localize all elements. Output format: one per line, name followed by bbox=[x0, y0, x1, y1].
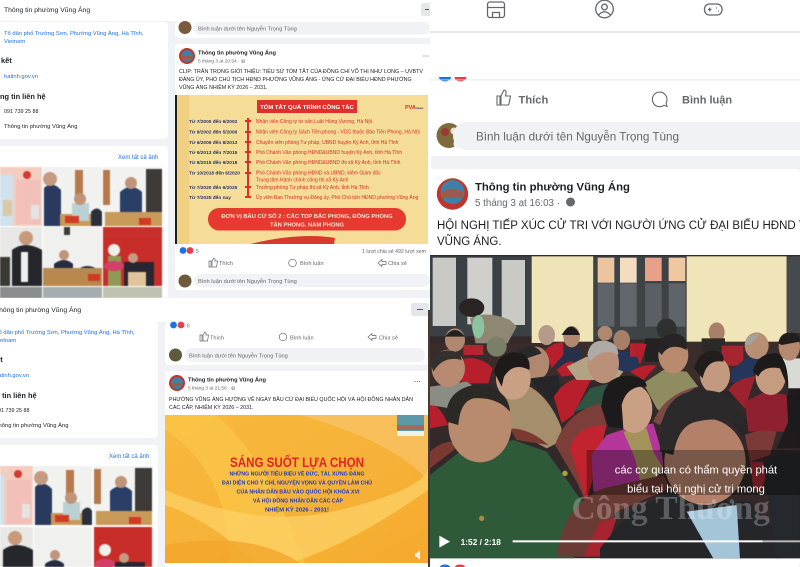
timeline dates: Từ 9/2002 đến 5/2006 bbox=[189, 128, 238, 136]
address: Vietnam bbox=[4, 39, 25, 45]
icon: groups bbox=[596, 0, 613, 18]
woman beige jacket bbox=[494, 352, 562, 448]
timeline dates: Từ 9/2013 đến 7/2015 bbox=[189, 149, 238, 156]
avatar bbox=[178, 21, 192, 34]
timeline dates: Từ 6/2006 đến 8/2013 bbox=[189, 139, 238, 146]
timeline dates bbox=[189, 118, 240, 201]
action buttons: Bình luận bbox=[290, 336, 314, 342]
comment input: Bình luận dưới tên Nguyễn Trọng Tùng bbox=[476, 130, 679, 144]
panel: reaction and comment row of second post bbox=[165, 322, 431, 365]
panel: photos lower left bbox=[0, 445, 158, 567]
reactions bbox=[439, 77, 466, 82]
woman dark hair bbox=[694, 351, 753, 437]
caption background bbox=[587, 450, 800, 495]
banner headline: SÁNG SUỐT LỰA CHỌN bbox=[230, 453, 364, 470]
phone: 091 739 25 88 bbox=[4, 109, 38, 115]
timeline positions bbox=[256, 119, 420, 201]
heading: links: kết bbox=[1, 56, 12, 65]
panel: page info upper left bbox=[0, 0, 430, 139]
video: election banner bbox=[165, 415, 428, 563]
panel: comment box top post: Bình luận dưới tên Nguyễn Trọng Tùng bbox=[198, 26, 297, 32]
electoral unit pill bbox=[208, 208, 406, 230]
action buttons: Chia sẻ bbox=[379, 336, 398, 342]
action buttons: Thích bbox=[210, 336, 224, 342]
header bar divider upper bbox=[175, 0, 431, 21]
icon: globe bbox=[566, 198, 575, 206]
comment input bbox=[453, 122, 800, 150]
post avatar bbox=[169, 375, 185, 391]
infographic: work history bbox=[175, 95, 428, 244]
timeline positions: Phó Chánh Văn phòng HĐND&UBND huyện Kỳ Anh, tỉnh Hà Tĩnh bbox=[256, 149, 402, 156]
timeline positions: Phó Chánh Văn phòng HĐND&UBND thị xã Kỳ Anh, tỉnh Hà Tĩnh bbox=[256, 159, 401, 166]
timeline positions: Trưởng phòng Tư pháp thị xã Kỳ Anh, tỉnh Hà Tĩnh bbox=[256, 184, 369, 191]
timeline dates: Từ 8/2015 đến 9/2018 bbox=[189, 159, 238, 166]
panel: right top navigation bbox=[430, 0, 800, 33]
dark person edge bbox=[777, 388, 800, 448]
reactions: 5 bbox=[196, 249, 199, 255]
label: like: Thích bbox=[518, 94, 548, 106]
chair right red bbox=[728, 377, 755, 408]
post date: 5 tháng 3 at 16:03 · bbox=[475, 198, 560, 209]
reactions bbox=[170, 322, 190, 330]
icon: marketplace bbox=[487, 2, 505, 18]
header bar upper: Thông tin phường Vũng Áng bbox=[4, 5, 90, 14]
reactions: 6 bbox=[187, 324, 190, 330]
commenter row: Bình luận dưới tên Nguyễn Trọng Tùng bbox=[198, 278, 297, 285]
banner title bbox=[257, 100, 357, 113]
front centre man bbox=[600, 390, 780, 558]
panel: right reaction and comment row bbox=[430, 33, 800, 156]
front centre chair bbox=[557, 475, 670, 557]
timeline bbox=[245, 118, 251, 198]
front left man bbox=[430, 385, 583, 558]
icon: comment bbox=[652, 92, 667, 107]
video: voters meeting: biểu tại hội nghị cử tri mong bbox=[627, 483, 765, 495]
post author: Thông tin phường Vũng Áng bbox=[198, 50, 276, 56]
panel: page info lower left bbox=[0, 298, 430, 438]
timeline positions: Phó Chánh Văn phòng HĐND và UBND, kiêm Giám đốc bbox=[256, 170, 381, 176]
post options: ··· bbox=[423, 54, 429, 60]
heading: contact: ng tin liên hệ bbox=[0, 92, 46, 101]
post stats: 1 lượt chia sẻ 492 lượt xem bbox=[362, 249, 426, 255]
timeline positions: Chuyên viên phòng Tư pháp, UBND huyện Kỳ Anh, tỉnh Hà Tĩnh bbox=[256, 139, 399, 146]
action buttons: Thích bbox=[219, 261, 233, 267]
electoral unit pill: TÂN PHONG, NAM PHONG bbox=[270, 222, 345, 228]
commenter avatar bbox=[436, 123, 462, 148]
man right white shirt bbox=[778, 333, 800, 388]
watermark: Công Thương bbox=[572, 490, 770, 527]
post author: Thông tin phường Vũng Áng bbox=[188, 376, 266, 384]
reactions bbox=[180, 247, 199, 255]
banner title: TÓM TẮT QUÁ TRÌNH CÔNG TÁC bbox=[260, 103, 355, 111]
post text: ĐẢNG ỦY, PHÓ CHỦ TỊCH HĐND PHƯỜNG VŨNG ÁNG - ỨNG CỬ ĐẠI BIỂU HĐND PHƯỜNG bbox=[179, 76, 412, 83]
banner lines: NHIỆM KỲ 2026 - 2031! bbox=[265, 506, 329, 514]
page name: Thông tin phường Vũng Áng bbox=[4, 123, 77, 130]
back row people bbox=[445, 318, 780, 372]
post date: 5 tháng 3 at 21:58 · ◍ bbox=[188, 386, 235, 392]
action buttons: Bình luận bbox=[300, 261, 324, 267]
electoral unit pill: ĐƠN VỊ BẦU CỬ SỐ 2 : CÁC TDP BẮC PHONG, ĐÔNG PHONG bbox=[221, 212, 393, 220]
man back grey bbox=[516, 346, 560, 402]
label: comment: Bình luận bbox=[682, 94, 732, 106]
man right back bbox=[732, 332, 769, 383]
man grey hair bbox=[567, 341, 627, 412]
reactions below video bbox=[440, 564, 465, 567]
caption text: các cơ quan có thẩm quyền phát bbox=[615, 464, 778, 476]
banner lines: NHỮNG NGƯỜI TIÊU BIỂU VỀ ĐỨC, TÀI, XỨNG ĐÁNG bbox=[230, 470, 364, 478]
timeline positions: Nhân viên Công ty Sách Tiền phong - VDC thuộc Báo Tiền Phong, Hà Nội bbox=[256, 130, 420, 136]
icon: gaming bbox=[704, 4, 722, 15]
link: see all photos: Xem tất cả ảnh bbox=[109, 454, 149, 460]
panel: post with work history bbox=[175, 44, 431, 290]
post text: CÁC CẤP, NHIỆM KỲ 2026 – 2031. bbox=[169, 403, 254, 411]
timeline positions: Ủy viên Ban Thường vụ Đảng ủy, Phó Chủ tịch HĐND phường Vũng Áng bbox=[256, 194, 419, 201]
post text: PHƯỜNG VŨNG ÁNG HƯỚNG VỀ NGÀY BẦU CỬ ĐẠI BIỂU QUỐC HỘI VÀ HỘI ĐỒNG NHÂN DÂN bbox=[169, 397, 413, 403]
speaker icon bbox=[415, 550, 420, 560]
post avatar bbox=[179, 48, 195, 64]
panel: post with election video bbox=[165, 371, 431, 567]
icon: like bbox=[497, 90, 510, 105]
video: voters meeting bbox=[430, 255, 800, 558]
action buttons bbox=[200, 332, 398, 342]
post options: ··· bbox=[414, 379, 421, 386]
man olive jacket bbox=[643, 334, 698, 412]
panel: photos upper left bbox=[0, 146, 168, 298]
time: 1:52 / 2:18 bbox=[461, 537, 501, 547]
link: see all photos: Xem tất cả ảnh bbox=[118, 155, 158, 161]
man left bbox=[430, 350, 477, 408]
timeline dates: Từ 7/2000 đến 6/2002 bbox=[189, 118, 238, 125]
action buttons: Chia sẻ bbox=[388, 261, 407, 267]
thumbnail logo bbox=[397, 415, 424, 436]
banner lines bbox=[222, 470, 372, 514]
woman pink bbox=[592, 376, 663, 495]
play button bbox=[439, 536, 450, 548]
woman red coat bbox=[745, 353, 788, 432]
commenter row bbox=[178, 274, 430, 288]
timeline dates: Từ 7/2020 đến 6/2025 bbox=[189, 184, 238, 191]
header bar upper bbox=[0, 0, 430, 21]
panel: comment box top post bbox=[175, 21, 431, 38]
progress bar bbox=[513, 540, 800, 542]
logo: PVAnews bbox=[405, 105, 424, 111]
banner lines: CỦA NHÂN DÂN BẦU VÀO QUỐC HỘI KHÓA XVI bbox=[236, 488, 360, 496]
post author: Thông tin phường Vũng Áng bbox=[475, 180, 630, 194]
banner lines: VÀ HỘI ĐỒNG NHÂN DÂN CÁC CẤP bbox=[253, 496, 343, 504]
room background bbox=[430, 255, 800, 558]
comment input bbox=[194, 22, 430, 34]
timeline positions: Nhân viên Công ty tư vấn Luật Hùng Vương, Hà Nội. bbox=[256, 119, 374, 125]
header bar lower bbox=[0, 298, 430, 322]
photo grid bbox=[0, 466, 152, 567]
post avatar bbox=[437, 178, 468, 210]
action buttons bbox=[209, 258, 407, 267]
banner lines: ĐẠI DIỆN CHO Ý CHÍ, NGUYỆN VỌNG VÀ QUYỀN LÀM CHỦ bbox=[222, 478, 372, 486]
post text: VŨNG ÁNG NHIỆM KỲ 2026 – 2031. bbox=[179, 83, 268, 91]
post date: 5 tháng 3 at 20:54 · ◍ bbox=[198, 58, 245, 64]
timeline positions: Trung tâm Hành chính công thị xã Kỳ Anh bbox=[256, 178, 349, 184]
website: hatinh.gov.vn bbox=[4, 74, 38, 80]
address: Tổ dân phố Trường Sơn, Phường Vũng Áng, Hà Tĩnh, bbox=[4, 31, 144, 37]
commenter row: Bình luận dưới tên Nguyễn Trọng Tùng bbox=[189, 352, 288, 360]
front chairs bbox=[430, 387, 777, 503]
post text: VŨNG ÁNG. bbox=[437, 235, 502, 248]
standing woman bbox=[459, 298, 517, 348]
strip: right edge of left screenshot bbox=[428, 310, 430, 567]
timeline dates: Từ 7/2025 đến nay bbox=[189, 194, 231, 201]
photo grid bbox=[0, 167, 162, 298]
panel: right post bbox=[430, 169, 800, 567]
middle row chairs bbox=[430, 342, 755, 428]
dark right shoulder bbox=[763, 452, 800, 558]
post text: CLIP: TRÂN TRỌNG GIỚI THIỆU: TIỂU SỬ TÓM TẮT CỦA ĐỒNG CHÍ VÕ THỊ NHƯ LONG – UVBTV bbox=[179, 69, 423, 75]
timeline dates: Từ 10/2018 đến 6/2020 bbox=[189, 170, 240, 176]
commenter row bbox=[169, 348, 425, 362]
